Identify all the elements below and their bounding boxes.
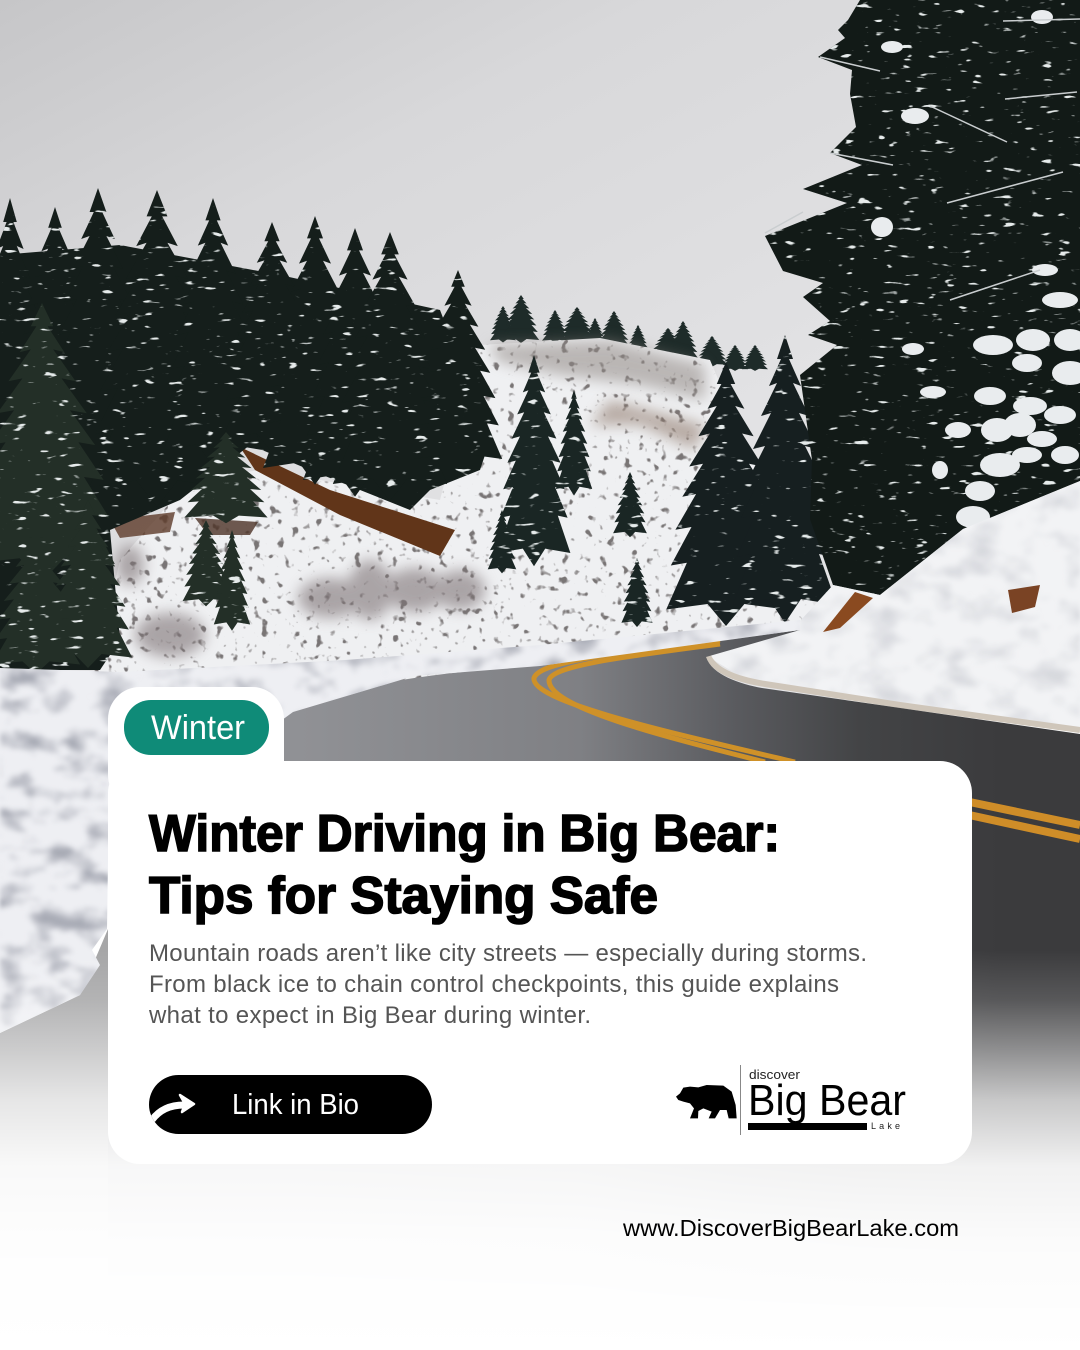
snowy hillside	[90, 338, 820, 700]
card body	[108, 761, 972, 1164]
description: From black ice to chain control checkpoints, this guide explains	[149, 971, 839, 998]
title: Tips for Staying Safe	[149, 867, 658, 925]
category pill: Winter	[151, 709, 245, 747]
title: Winter Driving in Big Bear:	[149, 805, 780, 863]
description: Mountain roads aren’t like city streets — especially during storms.	[149, 940, 867, 967]
icon: arrow	[152, 1095, 194, 1120]
mid right conifers	[666, 335, 837, 626]
description	[148, 940, 867, 1029]
snow clumps on right conifer	[871, 10, 1080, 528]
title	[149, 805, 780, 925]
hillside texture	[94, 340, 806, 680]
icon: bear	[676, 1085, 737, 1118]
bottom white fade	[0, 950, 1080, 1350]
logo: Discover Big Bear Lake: Lake	[871, 1121, 900, 1131]
right snow bank	[700, 470, 1080, 735]
logo: Discover Big Bear Lake: discover	[749, 1067, 801, 1082]
description: what to expect in Big Bear during winter.	[148, 1002, 591, 1029]
distant ridge trees	[490, 295, 768, 371]
category pill	[124, 700, 269, 755]
foreground left conifers	[0, 303, 268, 674]
card	[108, 687, 972, 1164]
logo: Discover Big Bear Lake: Big Bear	[748, 1076, 906, 1125]
sky	[0, 0, 1080, 700]
left snow bank	[0, 621, 800, 1158]
centre conifers	[488, 355, 653, 627]
website url: www.DiscoverBigBearLake.com	[622, 1215, 959, 1241]
large right conifer mass	[765, 0, 1080, 595]
link in bio button	[149, 1075, 432, 1134]
link in bio button: Link in Bio	[232, 1089, 359, 1121]
left conifer forest	[0, 188, 502, 670]
card tab	[108, 687, 284, 807]
road surface	[108, 630, 1080, 1350]
logo: Discover Big Bear Lake	[676, 1065, 906, 1135]
brown scrub on slopes	[110, 340, 705, 657]
